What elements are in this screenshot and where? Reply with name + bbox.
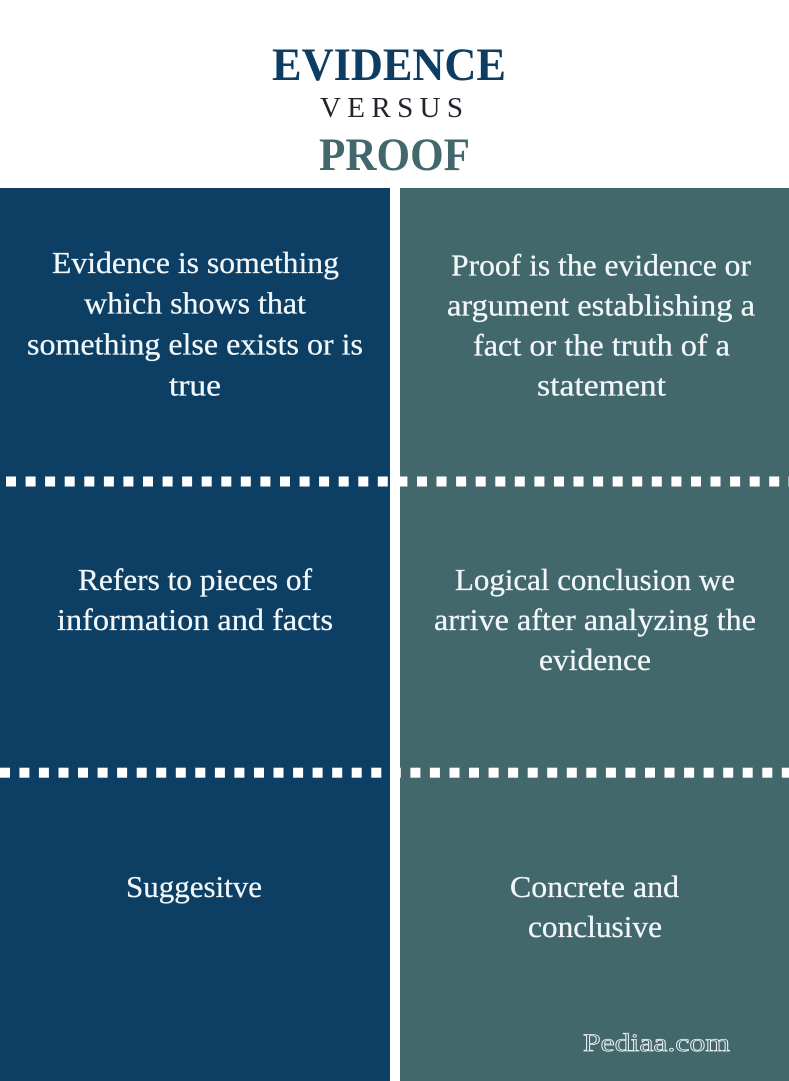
proof: definition: statement xyxy=(537,368,667,402)
proof: what it refers to: evidence xyxy=(539,643,651,677)
evidence: what it refers to xyxy=(57,563,333,637)
divider: first dotted row xyxy=(6,476,789,486)
proof: definition: Proof is the evidence or xyxy=(451,248,751,282)
proof: definition: fact or the truth of a xyxy=(473,328,730,362)
evidence: what it refers to: information and facts xyxy=(57,603,333,637)
proof: nature: conclusive xyxy=(528,910,662,944)
proof: nature xyxy=(510,870,679,944)
title: proof: PROOF xyxy=(319,129,470,181)
evidence: definition: Evidence is something xyxy=(52,246,339,280)
evidence: what it refers to: Refers to pieces of xyxy=(78,563,313,597)
evidence: nature: Suggesitve xyxy=(126,870,262,904)
evidence: definition: which shows that xyxy=(84,286,307,320)
title: evidence: EVIDENCE xyxy=(272,39,506,91)
evidence: definition: true xyxy=(169,368,221,402)
title xyxy=(272,39,506,181)
proof: what it refers to xyxy=(434,563,756,677)
evidence: definition xyxy=(27,246,363,402)
divider: second dotted row xyxy=(0,768,789,778)
proof: nature: Concrete and xyxy=(510,870,679,904)
evidence: definition: something else exists or is xyxy=(27,328,363,362)
proof: what it refers to: Logical conclusion we xyxy=(455,563,735,597)
proof: definition: argument establishing a xyxy=(447,288,755,322)
panel: evidence column xyxy=(0,188,390,1081)
watermark: Pediaa.com: Pediaa.com xyxy=(583,1030,731,1057)
panel: proof column xyxy=(400,188,789,1081)
proof: definition xyxy=(447,248,755,402)
title: versus: VERSUS xyxy=(320,92,463,124)
proof: what it refers to: arrive after analyzing the xyxy=(434,603,756,637)
